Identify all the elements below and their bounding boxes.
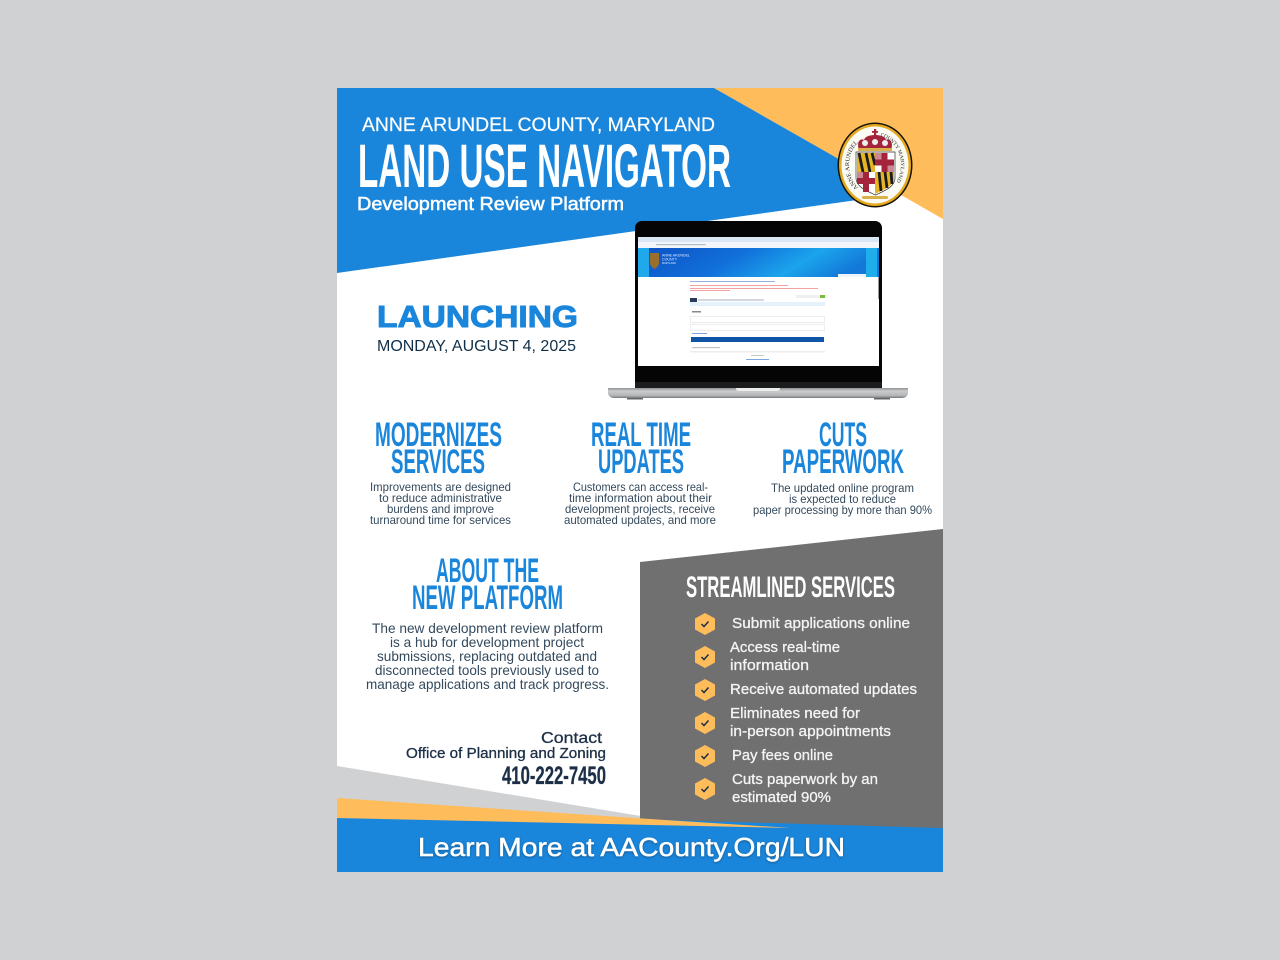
feature: real time updates: UPDATES [598,443,684,481]
feature: cuts paperwork: PAPERWORK [782,443,904,481]
service item: real-time information: information [730,658,809,674]
service item: in-person appointments [695,706,891,740]
footer yellow wedge [337,798,791,828]
feature: real time updates: REAL TIME [591,416,691,454]
title: LAND USE NAVIGATOR [358,132,731,200]
about the new platform heading: NEW PLATFORM [412,579,563,617]
seal lettering [845,133,904,190]
launch date: MONDAY, AUGUST 4, 2025 [377,338,576,355]
seal shield [856,152,895,199]
service item: real-time information: Access real-time [730,640,840,656]
feature: cuts paperwork: paper processing by more than 90% [753,503,932,517]
service item: automated updates [695,679,917,701]
laptop: ANNE ARUNDEL [662,254,690,258]
service item: automated updates: Receive automated updates [730,682,917,698]
county label: ANNE ARUNDEL COUNTY, MARYLAND [362,115,715,136]
service item: real-time information [695,640,840,674]
service item: cuts paperwork: estimated 90% [732,790,831,806]
contact block [406,730,606,790]
feature: real time updates [564,416,716,527]
feature: modernizes services: SERVICES [391,443,485,481]
feature: real time updates: automated updates, and more [564,513,716,527]
service item: submit applications: Submit applications online [732,616,910,632]
feature: modernizes services [370,416,511,527]
feature: modernizes services: MODERNIZES [375,416,502,454]
launching heading: LAUNCHING [377,299,578,334]
contact block: 410-222-7450 [502,762,606,790]
feature: real time updates: Customers can access real- [573,480,708,494]
laptop screen: site banner [638,248,879,277]
about text: manage applications and track progress. [366,676,609,692]
contact block: Contact [541,730,603,747]
feature: cuts paperwork: CUTS [819,416,867,454]
service item: in-person appointments: in-person appointments [730,724,891,740]
laptop: COUNTY [662,258,678,262]
footer gray wedge [337,766,665,820]
header blue banner [337,88,900,273]
about text: The new development review platform [372,620,603,636]
seal lettering: ANNE ARUNDEL [845,141,858,190]
feature: modernizes services: Improvements are designed [370,480,511,494]
about text: disconnected tools previously used to [375,662,599,678]
streamlined services panel [640,529,943,830]
feature: modernizes services: burdens and improve [387,502,494,516]
footer call to action: Learn More at AACounty.Org/LUN [418,832,845,862]
icon: county seal [838,122,912,208]
service item: cuts paperwork [695,772,878,806]
feature: modernizes services: to reduce administrative [379,491,502,505]
footer blue band [337,818,943,872]
about the new platform heading [412,552,563,617]
poster background [337,88,943,872]
laptop: MARYLAND [662,262,676,265]
service item: submit applications [695,613,910,635]
service item: in-person appointments: Eliminates need for [730,706,860,722]
feature: cuts paperwork [753,416,932,517]
about text: is a hub for development project [390,634,584,650]
contact block: Office of Planning and Zoning [406,746,606,762]
about text [366,620,609,692]
seal lettering: COUNTY MARYLAND [880,133,904,183]
service item: cuts paperwork: Cuts paperwork by an [732,772,878,788]
about text: submissions, replacing outdated and [377,648,597,664]
about the new platform heading: ABOUT THE [436,552,539,590]
laptop screen: browser bar [638,237,879,242]
feature: real time updates: development projects, receive [565,502,715,516]
service item: pay fees: Pay fees online [732,748,833,764]
feature: modernizes services: turnaround time for services [370,513,511,527]
feature: real time updates: time information about their [569,491,712,505]
header yellow wedge [714,88,943,219]
feature: cuts paperwork: is expected to reduce [789,492,896,506]
seal crown [858,129,892,151]
subtitle: Development Review Platform [357,194,624,214]
services heading: STREAMLINED SERVICES [686,571,895,604]
service item: pay fees [695,745,833,767]
laptop [608,221,908,400]
feature: cuts paperwork: The updated online program [771,481,914,495]
laptop screen: page content [690,280,775,283]
